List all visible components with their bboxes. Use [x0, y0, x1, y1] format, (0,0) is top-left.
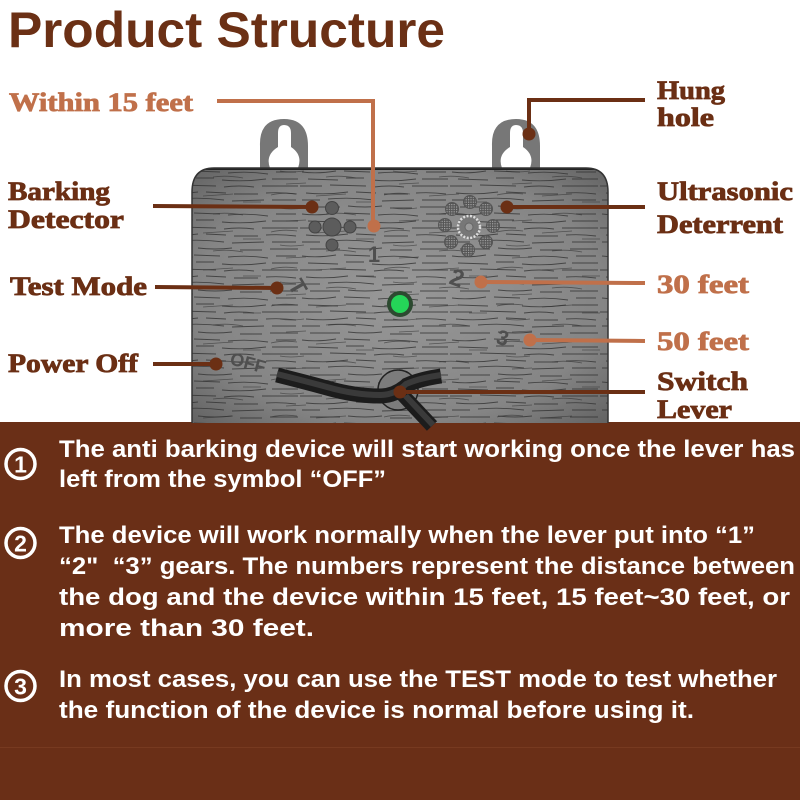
label: 30 feet: 30 feet: [657, 270, 749, 299]
label: barking detector: Detector: [8, 205, 124, 234]
label: test mode: Test Mode: [10, 272, 147, 301]
hanging lug left: [260, 119, 308, 168]
label: power off: Power Off: [8, 349, 138, 378]
LED indicator: [387, 291, 413, 317]
number badge 2: 2: [14, 530, 27, 556]
note 3: [6, 666, 777, 724]
label: ultrasonic deterrent: [500, 177, 793, 239]
label: hung hole: hole: [657, 103, 714, 132]
number badge 1: [6, 450, 35, 478]
note 1: The anti barking device will start working once the lever has: [59, 436, 795, 463]
number badge 3: [6, 672, 35, 700]
label: barking detector: [8, 177, 318, 234]
device body: [192, 168, 608, 424]
label: 50 feet: [524, 327, 749, 356]
label: within 15 feet: [9, 88, 380, 232]
label: test mode: [10, 272, 284, 301]
label: within 15 feet: Within 15 feet: [9, 88, 193, 117]
number badge 3: 3: [14, 674, 27, 700]
switch lever: [277, 370, 441, 426]
note 2: more than 30 feet.: [59, 615, 314, 642]
note 3: In most cases, you can use the TEST mode to test whether: [59, 666, 777, 693]
label: barking detector: Barking: [8, 177, 110, 206]
note 3: the function of the device is normal before using it.: [59, 697, 694, 724]
label: switch lever: Switch: [657, 367, 749, 396]
gear markings: [228, 242, 511, 377]
note 1: left from the symbol “OFF”: [59, 466, 386, 493]
label: power off: [8, 349, 222, 378]
label: hung hole: [522, 76, 725, 140]
barking detector holes: [309, 202, 356, 251]
note 2: “2" “3” gears. The numbers represent the distance between: [59, 553, 795, 580]
label: switch lever: Lever: [657, 395, 732, 424]
gear markings: 1: [368, 242, 380, 267]
label: hung hole: Hung: [657, 76, 725, 105]
label: switch lever: [394, 367, 749, 424]
number badge 1: 1: [14, 452, 27, 478]
ultrasonic deterrent holes: [438, 196, 500, 256]
note 2: the dog and the device within 15 feet, 15 feet~30 feet, or: [59, 584, 790, 611]
label: ultrasonic deterrent: Ultrasonic: [657, 177, 793, 206]
label: 50 feet: 50 feet: [657, 327, 749, 356]
device illustration: [192, 119, 608, 426]
title: Product Structure: [8, 2, 445, 58]
gear markings: OFF: [228, 349, 268, 377]
brown info band: [0, 422, 800, 800]
hanging lug right: [492, 119, 540, 168]
note 2: The device will work normally when the lever put into “1”: [59, 522, 755, 549]
note 2: [6, 522, 795, 642]
label: ultrasonic deterrent: Deterrent: [657, 210, 783, 239]
gear markings: 3: [494, 326, 511, 351]
label: 30 feet: [474, 270, 749, 299]
note 1: [6, 436, 795, 493]
number badge 2: [6, 528, 35, 558]
gear markings: 2: [446, 263, 468, 293]
gear markings: T: [283, 274, 313, 300]
